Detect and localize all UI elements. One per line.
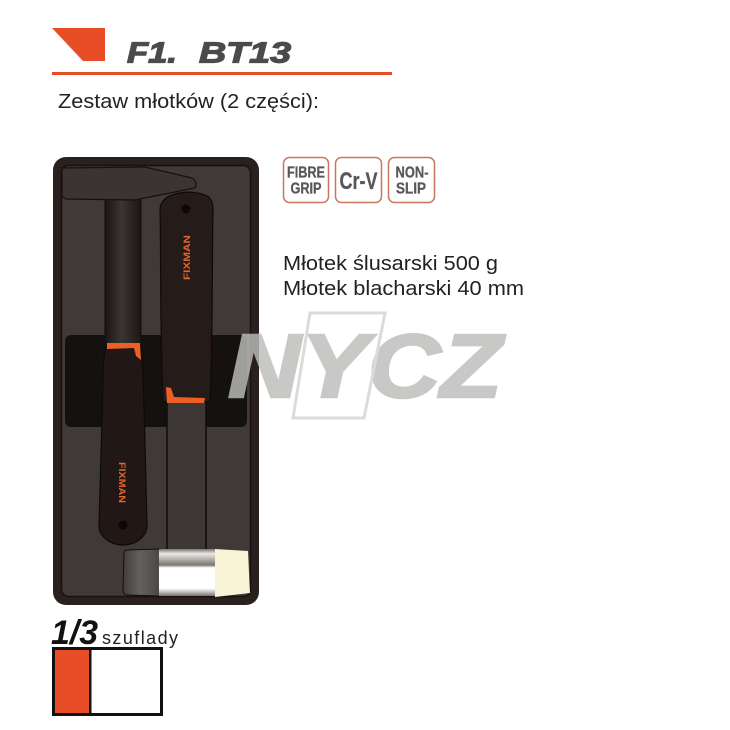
hammer: locksmith hammer [62,167,196,545]
hammer grip [99,345,147,545]
text block: tool list: Młotek blacharski 40 mm [283,278,524,300]
hammer neck [105,197,141,347]
mallet shaft [167,400,206,550]
badge: fibre grip: FIBRE [287,164,325,182]
badge: Cr-V [336,158,382,202]
rubber face [123,549,160,596]
badge: non-slip [388,158,434,202]
grip hole [118,520,128,530]
tray dark recess [65,335,247,427]
orange collar [166,387,205,403]
tray body [53,157,259,605]
badge: fibre grip: GRIP [290,180,322,198]
badge: fibre grip [284,158,328,202]
drawer size label: 1/3 [51,614,98,652]
brand label: FIXMAN [116,462,127,503]
hammer: mallet [123,192,250,597]
drawer size label: szuflady [102,628,178,648]
drawer size label [51,614,178,652]
chrome body [159,549,215,596]
badge: non-slip: SLIP [396,180,426,198]
watermark: NYCZ: NYCZ [228,317,505,417]
mallet head [123,549,250,597]
badge: Cr-V: Cr-V [340,168,378,195]
brand label: FIXMAN [182,235,193,280]
subtitle: Zestaw młotków (2 części): [58,90,319,113]
panel: tool tray with two hammers [53,157,259,605]
icon: orange corner flag [52,28,105,61]
orange collar [107,343,141,360]
hammer head [62,167,196,200]
cream plastic face [215,549,250,597]
grip hole [182,204,190,214]
badge: non-slip: NON- [396,164,428,182]
text block: tool list: Młotek ślusarski 500 g [283,253,498,275]
title [127,38,291,70]
title underline [52,72,392,75]
title: F1. [127,38,177,70]
mallet grip [160,192,213,402]
watermark frame [293,313,385,418]
tray inner surface [62,166,250,596]
text block: tool list [283,253,524,300]
drawer fraction diagram [54,648,162,714]
title: BT13 [199,38,291,70]
